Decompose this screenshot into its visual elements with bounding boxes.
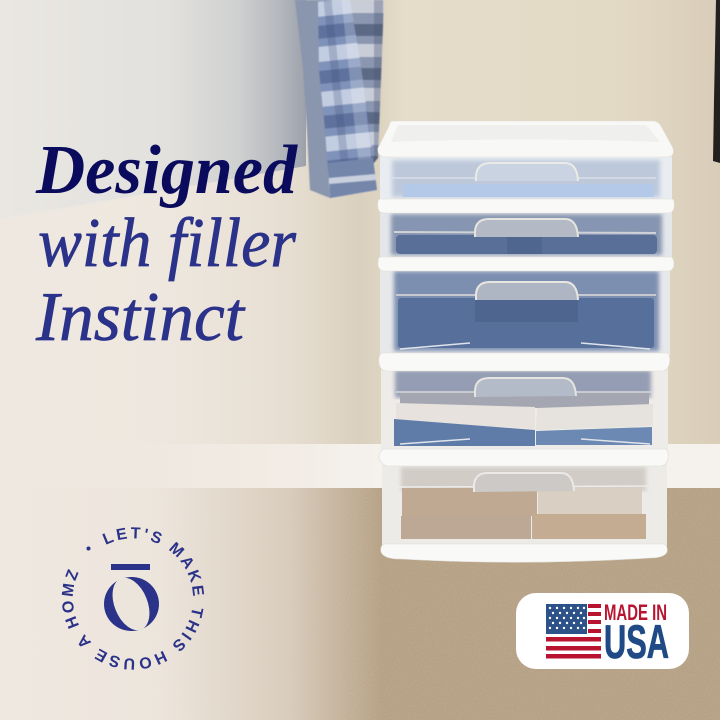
made in text: MADE IN	[604, 600, 667, 625]
plastic storage drawer tower	[378, 121, 674, 562]
made in USA badge	[516, 593, 689, 669]
drawer 5	[382, 464, 667, 548]
brand badge	[62, 527, 204, 670]
american flag	[546, 604, 601, 658]
plaid shirt	[295, 0, 384, 198]
drawer 4	[381, 368, 668, 452]
drawer 1	[380, 156, 672, 200]
logo o	[104, 572, 159, 636]
USA text: USA	[604, 615, 669, 668]
lid inset	[391, 125, 660, 142]
headline line 1: Designed	[35, 132, 298, 209]
slogan dot	[86, 546, 90, 550]
logo macron	[111, 564, 150, 570]
badge plate	[516, 593, 689, 669]
headline line 2: with filler	[38, 205, 297, 282]
drawer rims	[378, 199, 674, 562]
headline line 3: Instinct	[35, 279, 246, 356]
drawer 2	[380, 211, 672, 258]
lid	[378, 121, 673, 157]
headline	[35, 132, 298, 356]
circular slogan: LET'S MAKE THIS HOUSE A HOMZ	[62, 527, 204, 670]
dark garment edge	[713, 0, 720, 163]
hanging garment	[0, 0, 306, 219]
drawer 3	[380, 269, 670, 355]
